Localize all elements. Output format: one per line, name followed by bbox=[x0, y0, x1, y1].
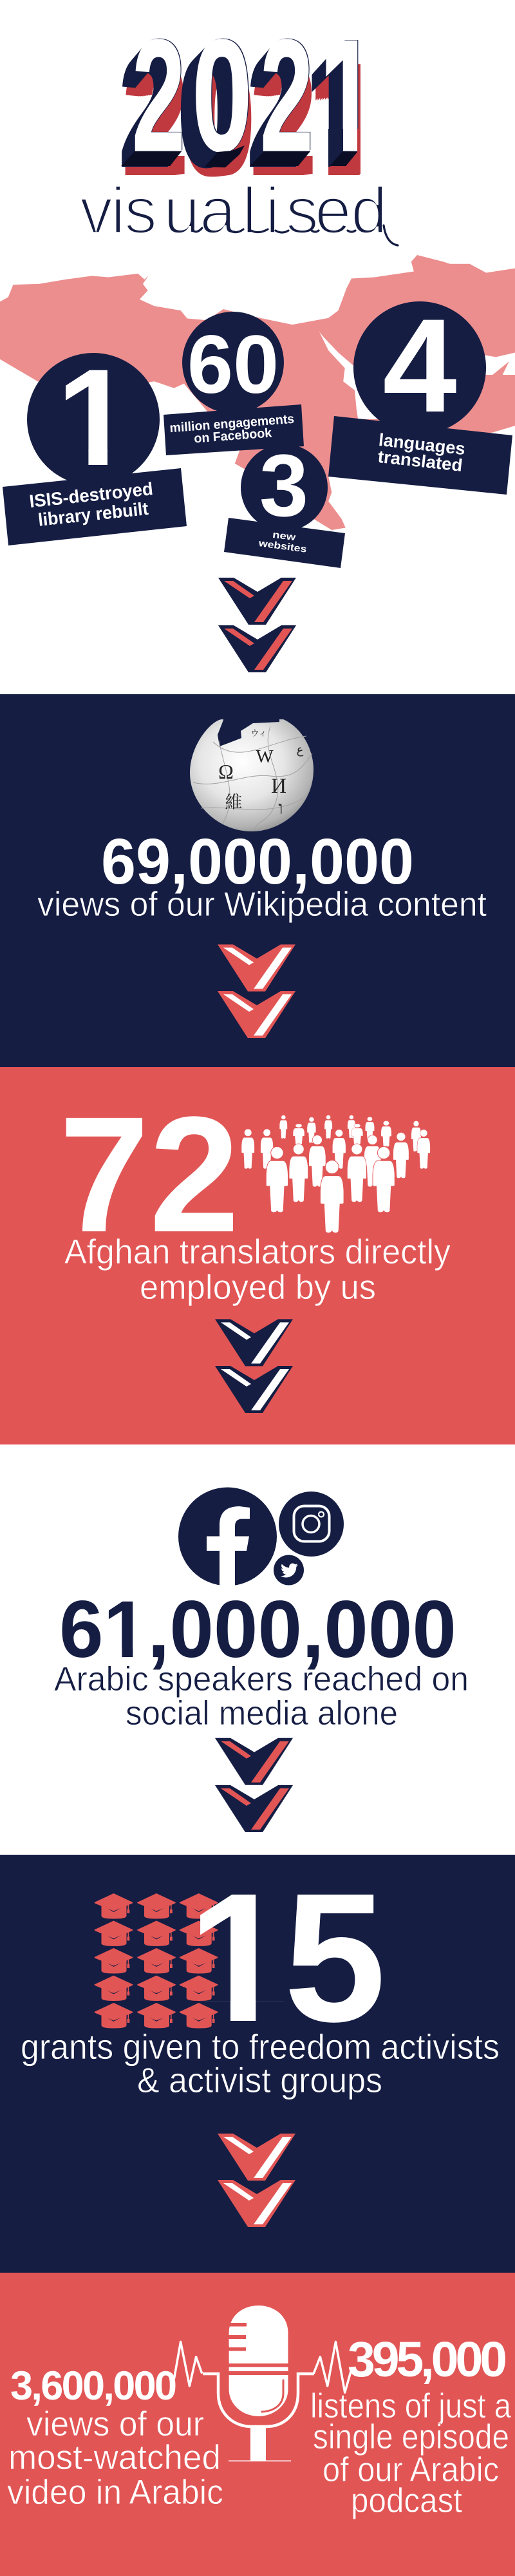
stat: podcast listens: of our Arabic bbox=[323, 2450, 499, 2489]
title: 2021: 1 bbox=[319, 6, 376, 185]
panel: map and headline stats bbox=[0, 255, 515, 672]
icon: microphone bbox=[174, 2306, 351, 2461]
icon: Wikipedia globe: W bbox=[256, 746, 274, 767]
stat: 4 languages: languages bbox=[378, 430, 466, 459]
caption: social reach bbox=[54, 1660, 469, 1732]
figure: 61,000,000: 61,000,000 bbox=[59, 1585, 456, 1674]
stat: 3 websites: 3 bbox=[259, 437, 308, 535]
stat: 1 library: library rebuilt bbox=[37, 498, 149, 530]
stat: 4 languages: translated bbox=[377, 447, 464, 475]
stat: video views: video in Arabic bbox=[7, 2473, 223, 2512]
icon: Wikipedia globe: ו bbox=[278, 799, 283, 819]
stat: 60 million bbox=[164, 312, 304, 455]
figure: 15 bbox=[200, 1895, 381, 2023]
icon: crowd of people bbox=[241, 1115, 430, 1233]
arrow: double chevron bbox=[218, 944, 295, 1038]
figure: 15: 5 bbox=[284, 1855, 386, 2060]
stat: video views bbox=[7, 2363, 223, 2512]
icon: Wikipedia globe: И bbox=[271, 775, 286, 798]
panel: Afghan translators bbox=[0, 1067, 515, 1444]
caption: grants: & activist groups bbox=[137, 2060, 382, 2100]
stat: 4 languages bbox=[328, 291, 512, 495]
icon: Facebook bbox=[178, 1488, 277, 1586]
icon: Wikipedia globe: ウィ bbox=[250, 728, 267, 738]
panel: Wikipedia views bbox=[0, 694, 515, 1067]
title: 2021: 0 bbox=[192, 6, 252, 185]
arrow: double chevron bbox=[218, 578, 296, 672]
stat: podcast listens: podcast bbox=[351, 2481, 462, 2520]
stat: 60 million: on Facebook bbox=[194, 426, 273, 446]
figure: 72: 72 bbox=[59, 1083, 239, 1267]
icon: graduation caps bbox=[94, 1893, 218, 2029]
panel: social media reach bbox=[54, 1488, 469, 1832]
panel: grants bbox=[0, 1855, 515, 2273]
stat: 1 library: ISIS-destroyed bbox=[28, 478, 154, 511]
icon: Wikipedia globe: Ω bbox=[218, 760, 234, 783]
stat: 60 million: 60 bbox=[187, 319, 279, 411]
caption: Wikipedia views: views of our Wikipedia content bbox=[37, 886, 487, 923]
arrow: double chevron bbox=[215, 1319, 293, 1413]
figure: 69,000,000: 69,000,000 bbox=[101, 826, 414, 898]
stat: 60 million: million engagements bbox=[169, 412, 295, 435]
caption: grants: grants given to freedom activists bbox=[21, 2027, 500, 2067]
map of the region bbox=[0, 255, 515, 530]
heading: visualised: visualised bbox=[80, 174, 388, 247]
caption: grants bbox=[21, 2027, 500, 2100]
caption: translators: Afghan translators directly bbox=[64, 1233, 451, 1271]
caption: social reach: social media alone bbox=[126, 1694, 398, 1732]
stat: podcast listens bbox=[310, 2332, 512, 2520]
stat: video views: 3,600,000 bbox=[10, 2363, 177, 2409]
stat: 3 websites: new bbox=[272, 529, 297, 543]
arrow: double chevron bbox=[218, 2134, 295, 2227]
figure: 15: 1 bbox=[188, 1855, 290, 2060]
icon: Wikipedia globe bbox=[190, 712, 314, 831]
icon: Wikipedia globe: 維 bbox=[225, 793, 242, 812]
arrow: double chevron bbox=[215, 1738, 293, 1832]
caption: translators: employed by us bbox=[140, 1268, 376, 1307]
stat: 1 library: 1 bbox=[57, 341, 133, 495]
stat: video views: most-watched bbox=[8, 2438, 221, 2477]
stat: 3 websites bbox=[224, 437, 345, 568]
panel: video and podcast bbox=[0, 2273, 515, 2576]
caption: translators bbox=[64, 1233, 451, 1307]
stat: video views: views of our bbox=[26, 2405, 204, 2443]
stat: 3 websites: websites bbox=[258, 538, 307, 555]
title: 2021: 2 bbox=[260, 6, 314, 185]
icon: Wikipedia globe: ع bbox=[297, 743, 304, 757]
caption: social reach: Arabic speakers reached on bbox=[54, 1660, 469, 1698]
icon: Twitter bbox=[274, 1555, 304, 1586]
title: 2021: 2 bbox=[132, 6, 185, 185]
stat: 1 library bbox=[3, 341, 187, 545]
icon: Instagram bbox=[279, 1492, 344, 1557]
title: 2021 bbox=[121, 6, 360, 185]
stat: podcast listens: 395,000 bbox=[348, 2332, 507, 2387]
stat: 4 languages: 4 bbox=[382, 291, 457, 440]
